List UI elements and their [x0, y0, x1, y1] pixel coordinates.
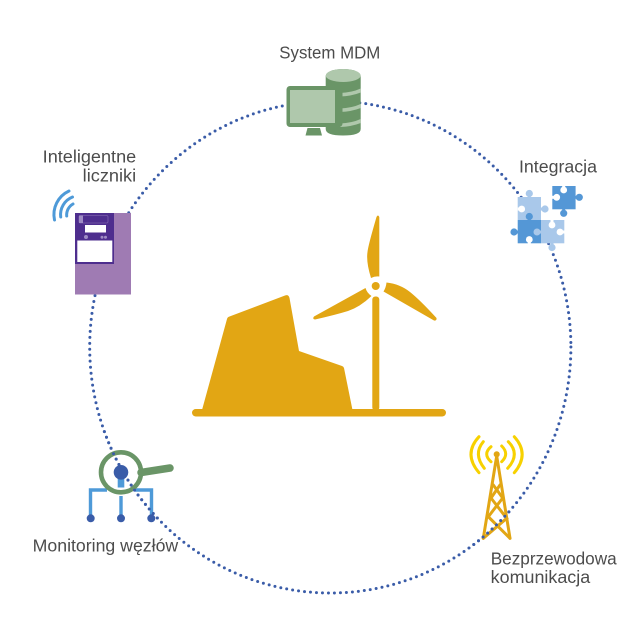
node: Bezprzewodowa komunikacja — [471, 437, 617, 587]
turbine blade: left — [313, 288, 372, 320]
node: Integracja — [510, 157, 597, 251]
ground line — [192, 409, 446, 416]
node: Monitoring wezlow — [33, 452, 179, 556]
label: Bezprzewodowa komunikacja: komunikacja — [491, 567, 591, 587]
label: Inteligentne liczniki: Inteligentne — [43, 147, 136, 167]
turbine hub — [372, 282, 380, 290]
icon: radio signal waves — [471, 437, 522, 473]
icon: transmission tower — [483, 452, 510, 538]
label: Integracja: Integracja — [519, 157, 597, 177]
icon: node tree — [87, 465, 155, 522]
label: Inteligentne liczniki: liczniki — [83, 166, 136, 186]
icon: puzzle pieces — [510, 186, 583, 251]
label: Monitoring węzłów: Monitoring węzłów — [33, 536, 179, 556]
node: System MDM — [279, 42, 380, 135]
icon: wifi waves — [54, 191, 73, 220]
icon: magnifying glass — [101, 452, 170, 492]
central wind farm illustration — [192, 216, 446, 416]
dotted cycle ring — [90, 101, 571, 593]
dotted ring overlay above icons — [102, 430, 510, 550]
infographic canvas — [34, 46, 617, 594]
label: Bezprzewodowa komunikacja: Bezprzewodowa — [491, 548, 617, 568]
label: Bezprzewodowa komunikacja — [491, 548, 617, 587]
icon: monitor — [286, 86, 342, 136]
node: Inteligentne liczniki — [43, 147, 136, 294]
turbine blade: top — [367, 216, 379, 278]
icon: smart meter — [75, 213, 131, 294]
label: Inteligentne liczniki — [43, 147, 136, 186]
turbine blade: right — [384, 282, 437, 321]
mountain — [202, 295, 352, 410]
icon: database server — [326, 69, 361, 136]
label: System MDM: System MDM — [279, 42, 380, 62]
turbine tower — [372, 296, 379, 410]
